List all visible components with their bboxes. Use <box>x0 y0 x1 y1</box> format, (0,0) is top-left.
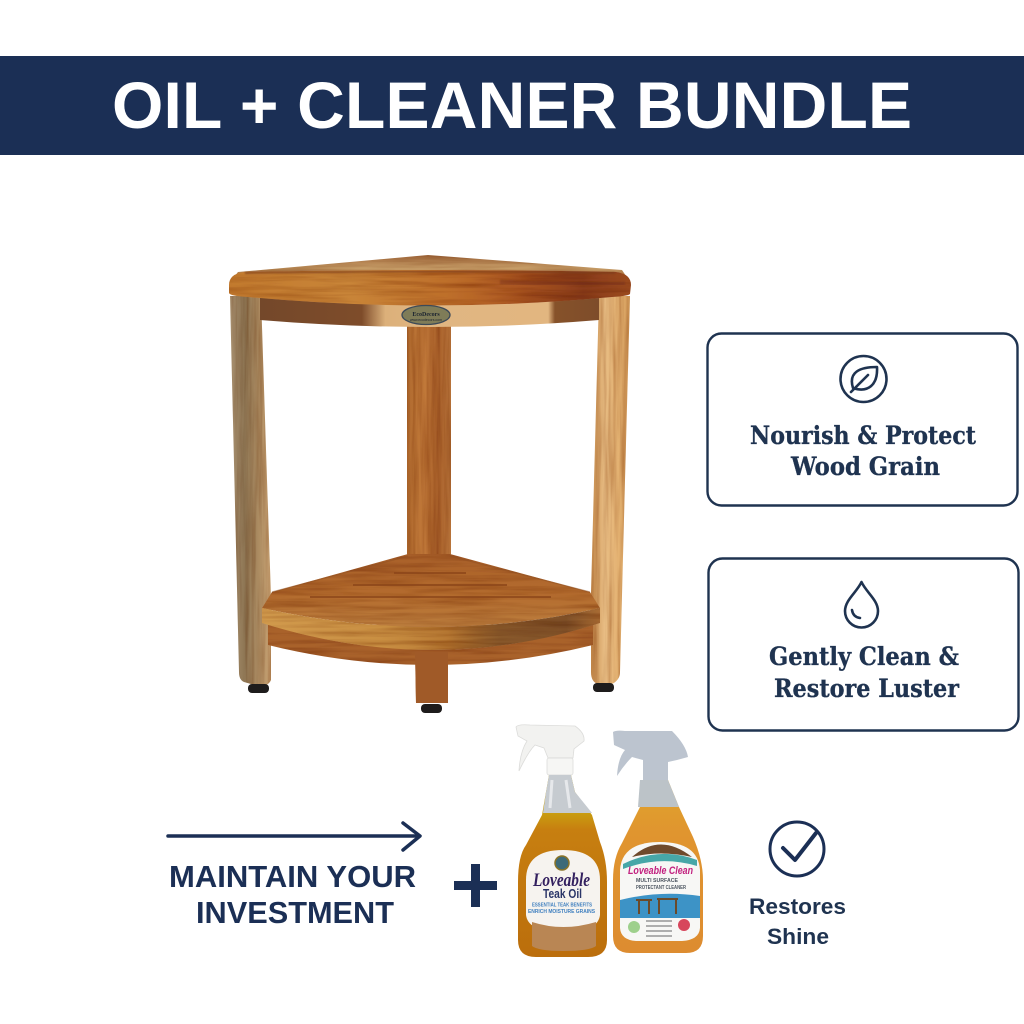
maintain your investment text: INVESTMENT <box>196 896 394 930</box>
teak oil bottle: ENRICH MOISTURE GRAINS <box>528 909 595 915</box>
spray trigger <box>613 731 688 780</box>
lower shelf top <box>262 554 600 627</box>
brand badge: www.ecodecors.com <box>410 318 442 322</box>
card: gently clean <box>708 558 1018 730</box>
shelf slats <box>310 573 551 597</box>
left leg <box>230 296 271 686</box>
bottle body <box>518 775 607 957</box>
icon: leaf <box>840 356 886 402</box>
card: nourish and protect: Wood Grain <box>790 452 940 481</box>
brand badge: EcoDecors <box>412 312 440 318</box>
teak oil bottle: Teak Oil <box>543 886 582 901</box>
label blue band <box>620 894 700 918</box>
callout text: Shine <box>767 924 829 949</box>
callout text: Restores <box>749 894 846 919</box>
lower shelf apron <box>268 625 593 665</box>
label <box>620 842 700 941</box>
maintain your investment text <box>169 860 416 930</box>
label wood arc <box>632 844 692 857</box>
maintain your investment text: MAINTAIN YOUR <box>169 860 416 894</box>
spray trigger <box>516 725 584 771</box>
bottle body <box>613 780 703 953</box>
card heading: Gently Clean & <box>769 642 959 671</box>
cleaner bottle: MULTI SURFACE <box>636 878 678 884</box>
title: OIL + CLEANER BUNDLE <box>112 68 912 142</box>
label <box>526 850 600 932</box>
rubber feet <box>248 683 614 713</box>
title banner <box>0 56 1024 155</box>
table photos <box>636 899 678 914</box>
teak oil bottle <box>516 725 607 957</box>
small logos <box>628 921 640 933</box>
brand badge <box>402 306 450 324</box>
card: gently clean: Restore Luster <box>774 674 960 703</box>
cleaner bottle: PROTECTANT CLEANER <box>636 885 686 891</box>
right leg <box>591 296 630 684</box>
icon: check circle <box>770 822 824 876</box>
back center leg <box>407 320 451 565</box>
teak oil bottle: ESSENTIAL TEAK BENEFITS <box>532 902 592 908</box>
card heading: Nourish & Protect <box>750 421 976 450</box>
front lower leg <box>415 640 448 703</box>
teak corner stool <box>229 255 631 713</box>
arrow <box>168 823 420 850</box>
callout text <box>749 894 846 949</box>
seat front edge <box>229 270 631 306</box>
plus sign <box>454 864 497 907</box>
clear upper bottle <box>638 780 679 807</box>
icon: water drop <box>845 582 878 628</box>
label text: Loveable Clean <box>628 865 693 877</box>
clear upper bottle <box>543 775 592 813</box>
label text: Loveable <box>532 870 590 891</box>
lower shelf front edge <box>262 608 600 650</box>
cleaner bottle <box>613 731 703 953</box>
front lower leg upper part <box>415 652 448 703</box>
seat apron <box>260 298 599 327</box>
restores shine callout <box>749 822 846 949</box>
crest <box>555 856 569 870</box>
card: nourish and protect <box>708 334 1018 506</box>
seat top surface <box>230 255 630 282</box>
